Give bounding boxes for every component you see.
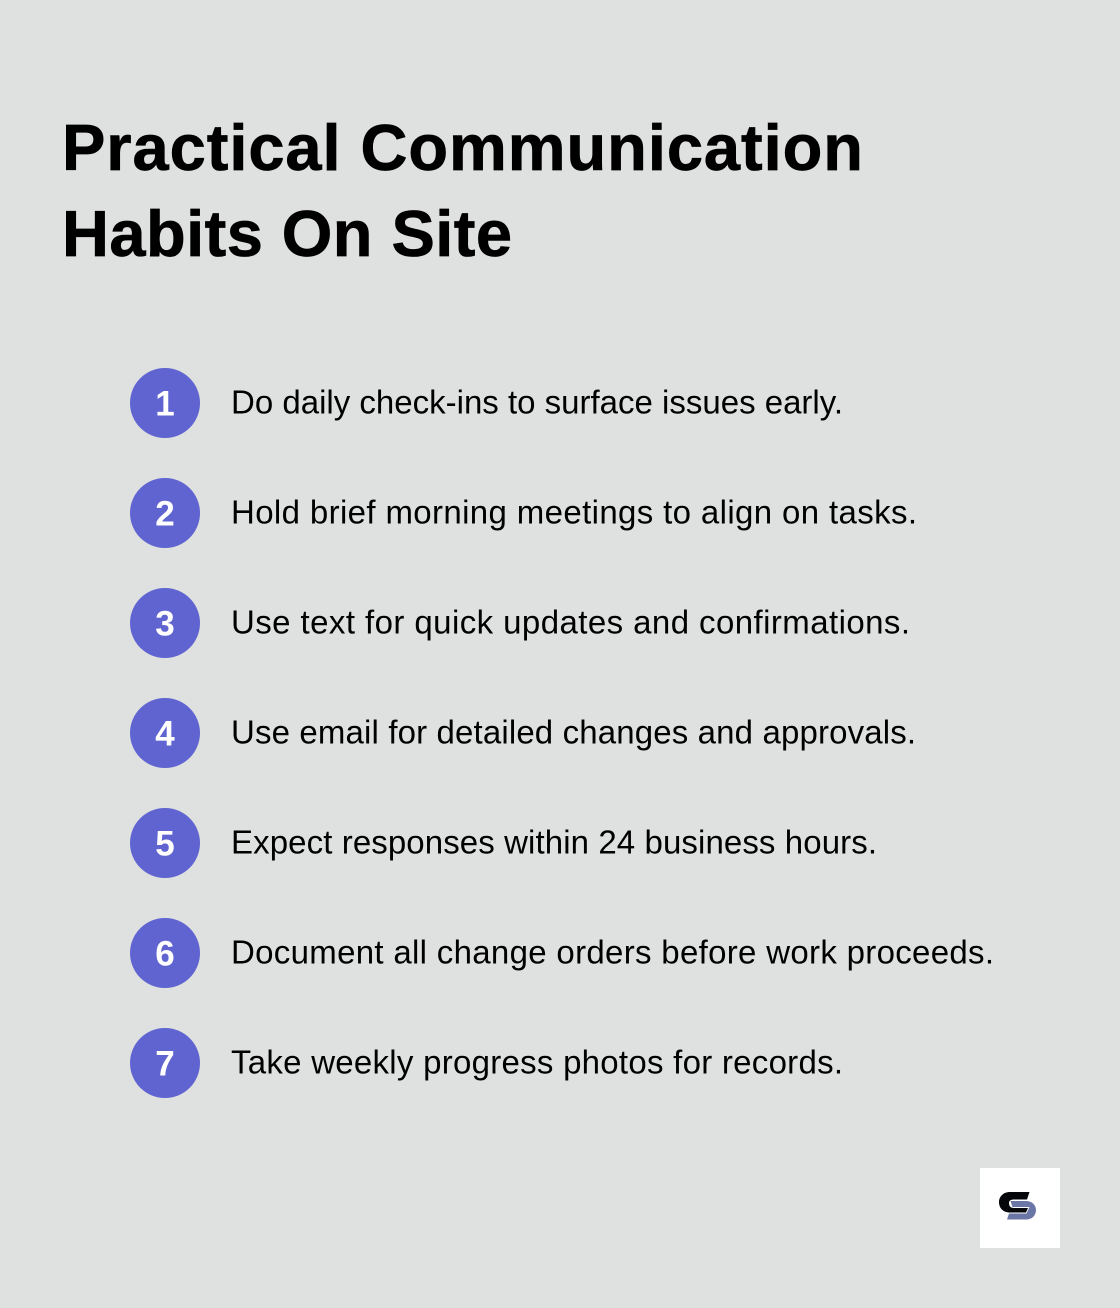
item 6: Document all change orders before work proceeds. — [231, 934, 994, 970]
item 6: 6 — [155, 934, 175, 974]
item 3: Use text for quick updates and confirmations. — [231, 604, 910, 640]
item 1: 1 — [155, 384, 175, 424]
item 5: Expect responses within 24 business hours. — [231, 824, 877, 860]
list of habits — [130, 368, 994, 1098]
logo badge — [980, 1168, 1060, 1248]
item 7: Take weekly progress photos for records. — [231, 1044, 843, 1080]
item 2 — [130, 478, 917, 548]
item 7 — [130, 1028, 843, 1098]
item 6 — [130, 918, 994, 988]
title: Practical Communication — [62, 111, 863, 184]
item 4: Use email for detailed changes and approvals. — [231, 714, 916, 750]
title — [62, 111, 863, 270]
item 2: 2 — [155, 494, 175, 534]
item 5: 5 — [155, 824, 175, 864]
item 2: Hold brief morning meetings to align on tasks. — [231, 494, 917, 530]
item 4: 4 — [155, 714, 175, 754]
item 7: 7 — [155, 1044, 175, 1084]
item 5 — [130, 808, 877, 878]
item 1 — [130, 368, 843, 438]
title: Habits On Site — [62, 197, 512, 270]
item 1: Do daily check-ins to surface issues early. — [231, 384, 843, 420]
item 3 — [130, 588, 910, 658]
item 4 — [130, 698, 916, 768]
item 3: 3 — [155, 604, 175, 644]
